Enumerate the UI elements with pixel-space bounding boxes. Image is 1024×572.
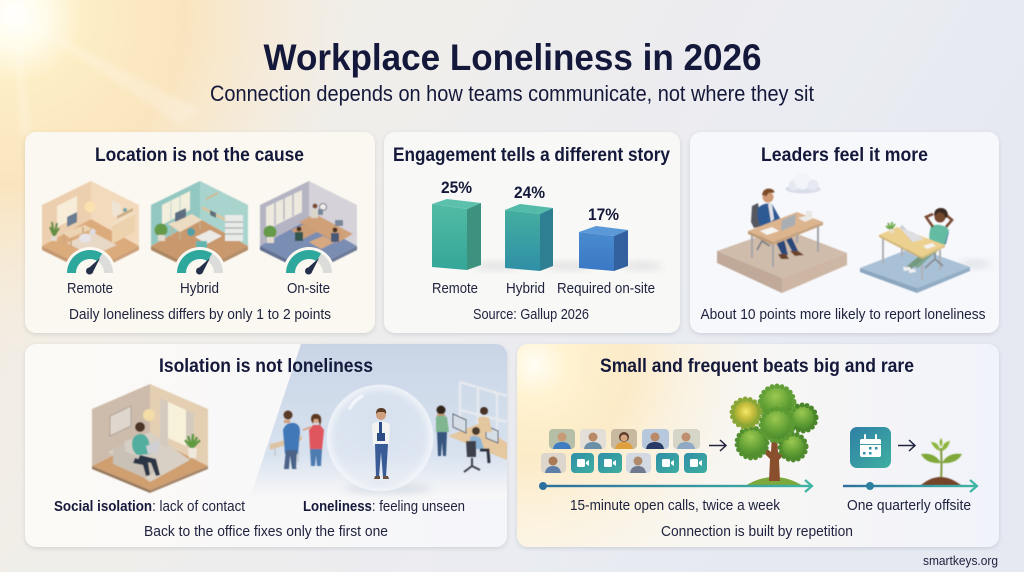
value: 24%: 24% bbox=[514, 183, 545, 202]
video tile 3 bbox=[656, 453, 679, 473]
panel: engagement bbox=[384, 132, 680, 333]
heading: engagement: Engagement tells a different story bbox=[393, 145, 670, 166]
timeline: frequent bbox=[539, 480, 812, 492]
icon: isolated room bbox=[92, 384, 208, 493]
icon: on-site room bbox=[260, 181, 357, 274]
panel: small and frequent bbox=[517, 344, 999, 547]
timeline: rare bbox=[843, 480, 977, 492]
arrow: calls to tree bbox=[709, 440, 726, 451]
value: 25%: 25% bbox=[441, 178, 472, 197]
label: remote: Remote bbox=[67, 280, 113, 297]
arrow: calendar to sprout bbox=[898, 440, 915, 451]
panel: location is not the cause bbox=[25, 132, 375, 333]
video tile 2 bbox=[598, 453, 622, 473]
avatar 1 bbox=[549, 429, 575, 449]
icon: hybrid gauge bbox=[174, 247, 226, 274]
label: on-site: On-site bbox=[287, 280, 330, 297]
source credit: smartkeys.org bbox=[923, 554, 998, 568]
source: Source: Gallup 2026 bbox=[473, 306, 589, 323]
caption: leaders: About 10 points more likely to report loneliness bbox=[700, 306, 986, 323]
sun glow bbox=[517, 344, 714, 534]
avatar 4 bbox=[642, 429, 669, 449]
icon: remote gauge bbox=[64, 247, 116, 274]
illustration: man in bubble bbox=[327, 385, 433, 494]
title: Workplace Loneliness in 2026 bbox=[264, 37, 762, 78]
label: loneliness: Loneliness: feeling unseen bbox=[303, 498, 465, 515]
icon: cloud bbox=[786, 172, 820, 194]
icon: tree bbox=[732, 386, 816, 486]
panel: isolation is not loneliness bbox=[25, 344, 512, 547]
avatar 7 bbox=[626, 453, 651, 473]
background: office side bbox=[250, 344, 507, 498]
illustration: employee at desk on low platform bbox=[860, 208, 991, 293]
avatar 3 bbox=[611, 429, 637, 449]
illustration: leader at desk on tall platform bbox=[717, 188, 847, 293]
label: hybrid: Hybrid bbox=[180, 280, 219, 297]
heading: leaders: Leaders feel it more bbox=[761, 145, 928, 166]
icon: remote room bbox=[42, 181, 139, 274]
bar: required on-site bbox=[579, 226, 628, 271]
label: open calls: 15-minute open calls, twice a week bbox=[570, 497, 780, 514]
caption: location: Daily loneliness differs by only 1 to 2 points bbox=[69, 306, 331, 323]
axis label: required on-site: Required on-site bbox=[557, 280, 655, 297]
heading: location: Location is not the cause bbox=[95, 145, 304, 166]
caption: repetition: Connection is built by repetition bbox=[661, 523, 853, 540]
icon: hybrid room bbox=[151, 181, 248, 274]
axis label: hybrid: Hybrid bbox=[506, 280, 545, 297]
caption: isolation: Back to the office fixes only the first one bbox=[144, 523, 388, 540]
avatar 5 bbox=[673, 429, 700, 449]
video tile 1 bbox=[571, 453, 594, 473]
illustration: colleagues talking bbox=[270, 410, 324, 469]
axis label: remote: Remote bbox=[432, 280, 478, 297]
avatar 2 bbox=[580, 429, 606, 449]
value: 17%: 17% bbox=[588, 205, 619, 224]
video tile 4 bbox=[684, 453, 707, 473]
icon: on-site gauge bbox=[283, 247, 335, 274]
subtitle: Connection depends on how teams communicate, not where they sit bbox=[210, 81, 814, 106]
icon: sprout bbox=[920, 438, 962, 486]
video call grid bbox=[541, 429, 707, 473]
bar: hybrid bbox=[505, 204, 553, 271]
heading: small and frequent: Small and frequent beats big and rare bbox=[600, 356, 914, 377]
bar chart bbox=[432, 178, 662, 297]
panel: leaders bbox=[690, 132, 999, 333]
label: social isolation: Social isolation: lack of contact bbox=[54, 498, 246, 515]
illustration: office team bbox=[436, 382, 512, 472]
bar: remote bbox=[432, 199, 481, 270]
label: offsite: One quarterly offsite bbox=[847, 497, 971, 514]
heading: isolation: Isolation is not loneliness bbox=[159, 356, 373, 377]
icon: calendar bbox=[850, 427, 891, 468]
avatar 6 bbox=[541, 453, 566, 473]
